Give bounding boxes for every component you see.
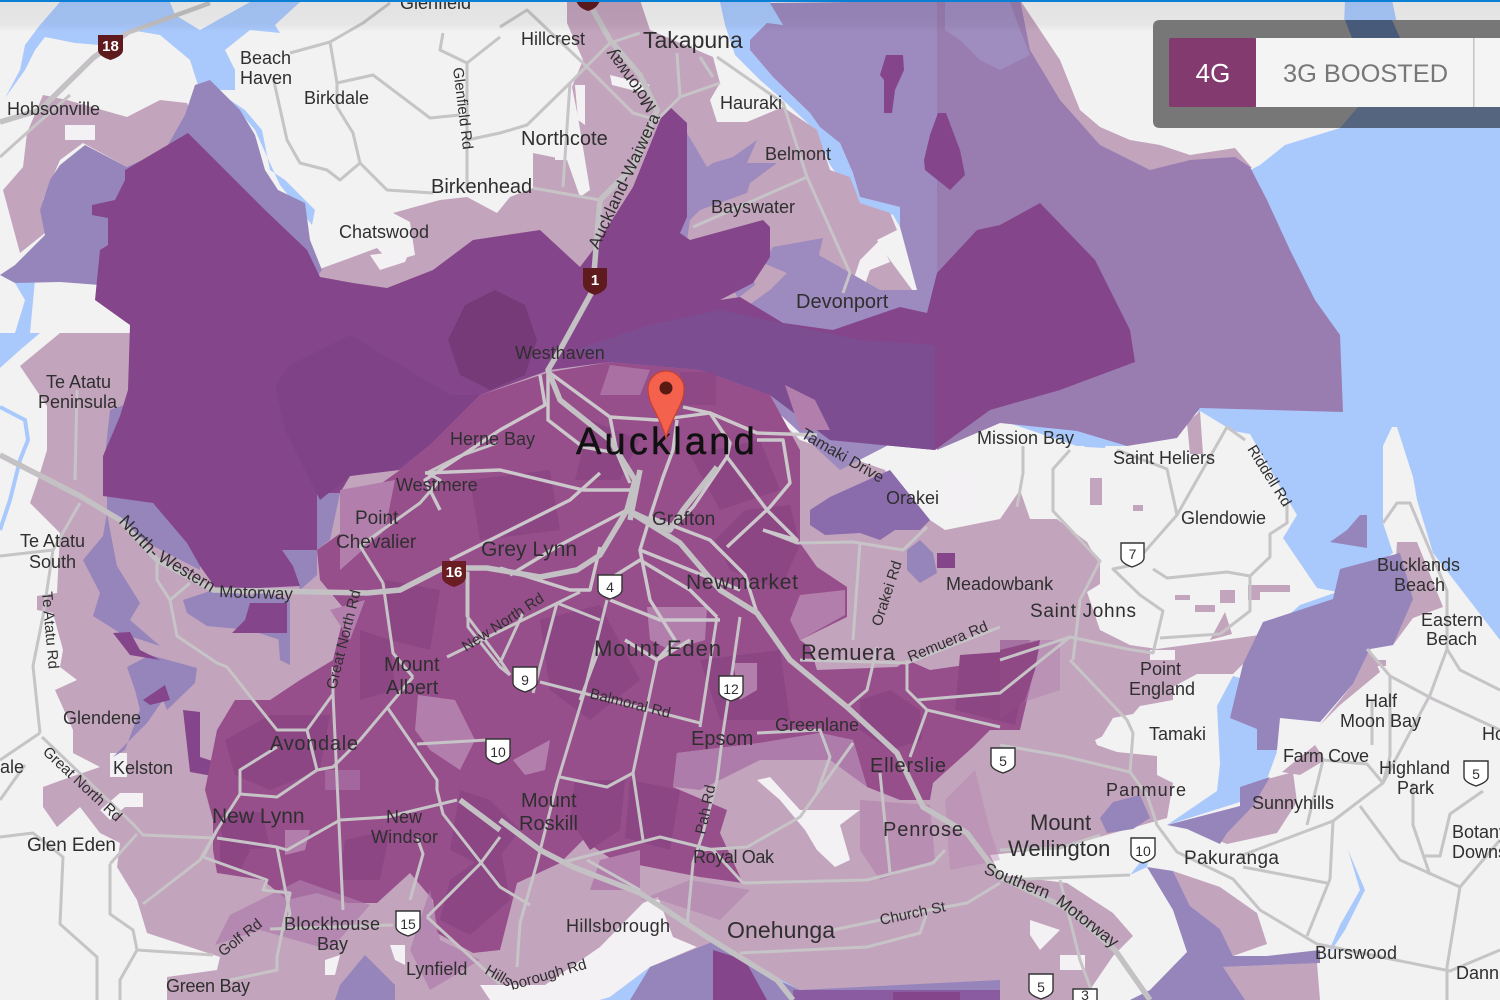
label: Point: Point	[355, 508, 399, 529]
label: Green Bay: Green Bay	[166, 976, 250, 996]
shield: 5 south: 5	[1037, 979, 1045, 995]
coverage: white gaps inside the light zone	[65, 75, 1175, 1000]
label: Onehunga: Onehunga	[727, 917, 835, 943]
shield: 5 east	[1464, 761, 1488, 786]
road label: Riddell Rd: Riddell Rd	[1244, 442, 1295, 510]
label: Mission Bay: Mission Bay	[977, 428, 1074, 448]
label: Bay: Bay	[317, 934, 348, 954]
road label: Te Atatu Rd: Te Atatu Rd	[38, 591, 62, 670]
label: Highland: Highland	[1379, 758, 1450, 778]
coverage: dark purple 4G over water	[92, 107, 1135, 590]
stream west	[0, 407, 28, 530]
label: Hobsonville: Hobsonville	[7, 99, 100, 119]
selector backdrop	[1153, 20, 1500, 128]
shield: 12: 12	[723, 681, 739, 697]
label: Herne Bay: Herne Bay	[450, 429, 535, 449]
label: Birkenhead: Birkenhead	[431, 176, 532, 198]
label: New: New	[386, 807, 423, 827]
label: Tamaki: Tamaki	[1149, 724, 1206, 744]
road label: Balmoral Rd: Balmoral Rd	[588, 685, 672, 722]
shield: 5 south	[1029, 974, 1053, 999]
label: Penrose: Penrose	[883, 819, 963, 841]
road network: central grid roads	[425, 370, 817, 660]
label: Pakuranga: Pakuranga	[1184, 848, 1279, 869]
shield: 18	[98, 35, 123, 60]
label: Bucklands: Bucklands	[1377, 555, 1460, 575]
shield: 5	[991, 748, 1015, 773]
label: Mount: Mount	[1030, 810, 1091, 835]
label: Glendowie: Glendowie	[1181, 508, 1266, 528]
label: Dann: Dann	[1456, 963, 1499, 983]
panel: network selector	[1153, 20, 1500, 128]
top header shade band	[0, 2, 1500, 32]
state highway shields: red	[98, 0, 607, 587]
shield: top	[576, 0, 600, 11]
road label: Motorway south: Motorway	[1053, 891, 1123, 952]
backdrop over water, lower	[1340, 107, 1500, 128]
label: Burswood: Burswood	[1315, 943, 1397, 963]
coverage: light band along Birkenhead and Northcote	[317, 0, 930, 340]
road network: motorways	[0, 3, 1150, 1000]
road label: Southern: Southern	[982, 859, 1053, 903]
label: Westmere: Westmere	[396, 475, 478, 495]
label: Greenlane: Greenlane	[775, 715, 859, 735]
shield: 5: 5	[999, 753, 1007, 769]
coverage: darker overlap harbour spot	[448, 290, 537, 390]
road label: Great North Rd lower: Great North Rd	[39, 743, 125, 825]
shield: 15: 15	[400, 916, 416, 932]
label: Hillcrest: Hillcrest	[521, 29, 585, 49]
coverage: light speckle patches Saint Heliers	[1000, 411, 1386, 666]
coverage: darker spots in the blue-purple zone	[880, 55, 965, 190]
label: Te Atatu: Te Atatu	[20, 531, 85, 551]
label: Remuera: Remuera	[801, 640, 896, 665]
shield: 5 east: 5	[1472, 766, 1480, 782]
shield: 4: 4	[606, 579, 614, 595]
road label: Hills: Hills	[482, 962, 515, 991]
shield: 16	[442, 561, 466, 587]
tab: 4G active: 4G	[1196, 58, 1230, 88]
shield: 9: 9	[521, 672, 529, 688]
road label: North-: North-	[115, 511, 164, 561]
shield: 18: 18	[102, 38, 119, 55]
label: Orakei: Orakei	[886, 488, 939, 508]
label: Windsor: Windsor	[371, 827, 438, 847]
road label: Orakei Rd: Orakei Rd	[869, 559, 906, 628]
shield: 7	[1121, 543, 1144, 567]
label: Takapuna: Takapuna	[643, 27, 743, 53]
label: Royal Oak: Royal Oak	[693, 847, 775, 867]
coverage: urban purple central zone	[205, 362, 1040, 953]
label: Westhaven: Westhaven	[515, 343, 605, 363]
label: Newmarket: Newmarket	[686, 571, 798, 594]
label: Epsom: Epsom	[691, 728, 753, 750]
state highway shields: white	[396, 543, 1488, 1000]
label: Glendene: Glendene	[63, 708, 141, 728]
shield: 10	[486, 739, 510, 764]
tab: 4G active	[1169, 38, 1256, 107]
shield: 10 east	[1131, 838, 1155, 863]
label: Park: Park	[1397, 778, 1435, 798]
road label: Western: Western	[155, 547, 219, 596]
label: Wellington: Wellington	[1008, 836, 1110, 861]
label: Auckland city name: Auckland	[576, 421, 758, 463]
label: Sunnyhills: Sunnyhills	[1252, 793, 1334, 813]
road label: borough Rd: borough Rd	[508, 956, 588, 994]
label: Peninsula: Peninsula	[38, 392, 118, 412]
shield: 12	[719, 676, 743, 701]
label: Te Atatu: Te Atatu	[46, 372, 111, 392]
coverage: main light purple 3G zone	[20, 280, 1267, 1000]
label: Roskill: Roskill	[519, 813, 578, 835]
label: Birkdale: Birkdale	[304, 88, 369, 108]
road label: Motorway north: Motorway	[601, 45, 660, 116]
tab: 3G BOOSTED	[1256, 38, 1500, 107]
label: Northcote: Northcote	[521, 128, 608, 150]
label: Saint Heliers: Saint Heliers	[1113, 448, 1215, 468]
label: Chatswood: Chatswood	[339, 222, 429, 242]
tab: 3G BOOSTED: 3G BOOSTED	[1283, 60, 1448, 88]
shield: 10 east: 10	[1135, 843, 1151, 859]
label: Beach: Beach	[1426, 629, 1477, 649]
label: Half: Half	[1365, 691, 1398, 711]
label: Glen Eden: Glen Eden	[27, 835, 116, 856]
road label: Motorway west: Motorway	[219, 582, 294, 604]
coverage: blue-purple zone north-east harbour	[700, 0, 1343, 470]
label: Mount: Mount	[521, 790, 577, 812]
top blue line	[0, 0, 1500, 2]
label: ale: ale	[0, 757, 24, 777]
label: Chevalier: Chevalier	[336, 532, 417, 553]
road label: New North Rd: New North Rd	[459, 590, 547, 655]
coverage: lighter urban patches	[285, 365, 845, 890]
label: New Lynn: New Lynn	[212, 805, 305, 828]
label: Albert: Albert	[386, 677, 439, 699]
shield: 15	[396, 911, 420, 936]
label: Farm Cove: Farm Cove	[1283, 746, 1369, 766]
backdrop over water, upper	[1345, 20, 1400, 38]
coverage: light purple north-west	[3, 95, 200, 253]
coverage: Tamaki estuary blue-purple	[1100, 515, 1413, 1000]
label: Avondale: Avondale	[270, 733, 358, 755]
road label: Tamaki Drive: Tamaki Drive	[798, 426, 887, 487]
label: Beach: Beach	[240, 48, 291, 68]
road label: Auckland-Waiwera: Auckland-Waiwera	[584, 110, 664, 252]
label: Meadowbank: Meadowbank	[946, 574, 1054, 594]
shield: 9	[513, 667, 537, 692]
label: Eastern: Eastern	[1421, 610, 1483, 630]
label: Mount Eden: Mount Eden	[594, 636, 721, 661]
road label: Great North Rd upper: Great North Rd	[323, 588, 364, 691]
label: Haven: Haven	[240, 68, 292, 88]
shield: 3	[1073, 987, 1097, 1000]
road label: Remuera Rd: Remuera Rd	[905, 618, 990, 666]
shield: 16: 16	[446, 564, 462, 581]
coverage: dark urban patches	[218, 372, 1030, 935]
coverage: mid-tone transition south and east of urban zone	[215, 640, 1060, 990]
label: Grey Lynn: Grey Lynn	[481, 538, 577, 561]
coverage: dark east patch Saint Johns	[1000, 640, 1040, 720]
road label: Golf Rd: Golf Rd	[215, 915, 266, 960]
label: Ellerslie: Ellerslie	[870, 755, 946, 777]
shield: 1	[583, 268, 607, 295]
label: England: England	[1129, 679, 1195, 699]
coverage: blue-purple zone north-west harbour	[0, 80, 322, 300]
label: Beach: Beach	[1394, 575, 1445, 595]
label: Grafton: Grafton	[652, 509, 715, 530]
shield: 7: 7	[1129, 546, 1137, 562]
label: Devonport: Devonport	[796, 291, 889, 313]
label: Panmure: Panmure	[1106, 780, 1186, 800]
label: Kelston: Kelston	[113, 758, 173, 778]
label: Belmont: Belmont	[765, 144, 831, 164]
label: Mount: Mount	[384, 654, 440, 676]
shield: 4	[598, 575, 622, 599]
coverage: light band Tamaki north shore	[1020, 0, 1252, 180]
water: south harbour shoreline	[600, 945, 1000, 1000]
label: Point: Point	[1140, 659, 1181, 679]
label: South: South	[29, 552, 76, 572]
label: Saint Johns: Saint Johns	[1030, 601, 1136, 622]
coverage: south harbour zone at bottom edge	[335, 940, 1000, 1000]
label: Moon Bay: Moon Bay	[1340, 711, 1421, 731]
shield: 10: 10	[490, 744, 506, 760]
road label: Church St: Church St	[878, 898, 948, 929]
coverage: mid overlap areas in harbour	[275, 310, 935, 500]
road label: Glenfield Rd: Glenfield Rd	[449, 66, 476, 150]
icon: red map pin	[648, 371, 684, 438]
label: Lynfield: Lynfield	[406, 959, 467, 979]
label: Bayswater: Bayswater	[711, 197, 795, 217]
label: Hauraki: Hauraki	[720, 93, 782, 113]
road label: Pah Rd: Pah Rd	[692, 783, 719, 836]
label: Hillsborough: Hillsborough	[566, 916, 670, 936]
coverage: light patches Sunnyhills and Pakuranga	[1173, 542, 1443, 1000]
label: Blockhouse: Blockhouse	[284, 914, 380, 934]
coverage: dark purple strips along west creeks	[113, 603, 287, 780]
shield: 1: 1	[591, 272, 599, 289]
coverage: Orakei basin blue-purple	[810, 470, 955, 583]
coverage: blue-purple inlets on the North Shore	[680, 133, 823, 298]
coverage: blue-purple patches over west creeks	[83, 400, 340, 757]
